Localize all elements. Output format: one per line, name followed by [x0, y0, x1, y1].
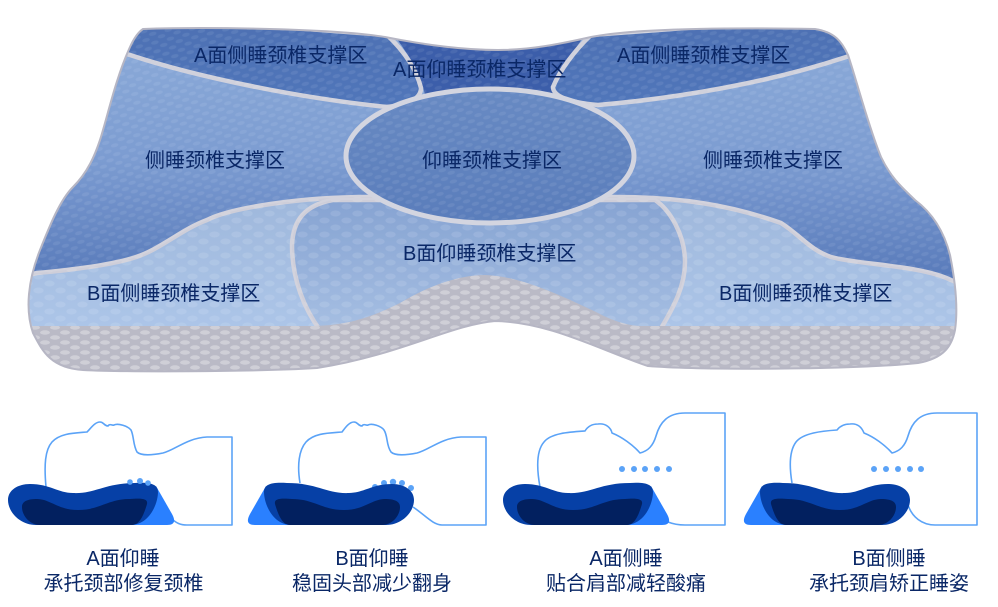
oval weave texture: [349, 92, 631, 220]
pillow with zones: [15, 15, 985, 380]
panel: B-face side: [744, 413, 977, 595]
A-face left side zone: [127, 29, 424, 109]
zone label: A面侧睡颈椎支撑区: [194, 44, 367, 67]
shoulder dots: [871, 466, 924, 472]
panel: A-face side: [503, 413, 725, 595]
caption: 承托颈肩矫正睡姿: [809, 572, 969, 595]
caption: A面侧睡: [589, 547, 663, 570]
panel: B-face supine: [248, 422, 486, 595]
B-face supine zone: [292, 200, 685, 330]
supine neck zone oval: [346, 89, 634, 223]
panel: A-face supine: [8, 422, 232, 595]
caption: 贴合肩部减轻酸痛: [546, 572, 706, 595]
caption: 承托颈部修复颈椎: [44, 572, 204, 595]
shoulder dots: [619, 466, 672, 472]
head outline: [299, 422, 486, 525]
B-face supine weave texture: [294, 204, 682, 258]
upper weave texture: [36, 29, 952, 277]
caption: B面仰睡: [335, 547, 409, 570]
zone label: A面侧睡颈椎支撑区: [617, 44, 790, 67]
pillow icon: [503, 483, 669, 525]
head outline: [45, 422, 232, 525]
zone label: B面侧睡颈椎支撑区: [87, 282, 260, 305]
zone label: B面仰睡颈椎支撑区: [403, 242, 576, 265]
zone label: B面侧睡颈椎支撑区: [719, 282, 892, 305]
A-face right side zone: [550, 29, 848, 108]
B-face side weave texture: [15, 197, 985, 345]
pillow icon: [744, 483, 910, 525]
B-face side zones: [30, 194, 956, 326]
zone label: 仰睡颈椎支撑区: [422, 149, 562, 172]
support dots: [372, 479, 414, 491]
pillow edge piping: [29, 28, 956, 371]
head outline: [790, 413, 977, 525]
head outline: [538, 413, 725, 525]
zone label: A面仰睡颈椎支撑区: [393, 58, 566, 81]
caption: B面侧睡: [852, 547, 926, 570]
grey side panel: [32, 275, 954, 370]
support dots: [127, 478, 151, 486]
zone label: 侧睡颈椎支撑区: [145, 149, 285, 172]
grey weave texture: [32, 276, 954, 370]
caption: 稳固头部减少翻身: [292, 572, 452, 595]
side sleep zones: [34, 40, 953, 278]
A-face supine zone: [398, 40, 581, 94]
pillow icon: [8, 483, 174, 525]
zone label: 侧睡颈椎支撑区: [703, 149, 843, 172]
caption: A面仰睡: [86, 547, 160, 570]
pillow icon: [248, 483, 414, 525]
